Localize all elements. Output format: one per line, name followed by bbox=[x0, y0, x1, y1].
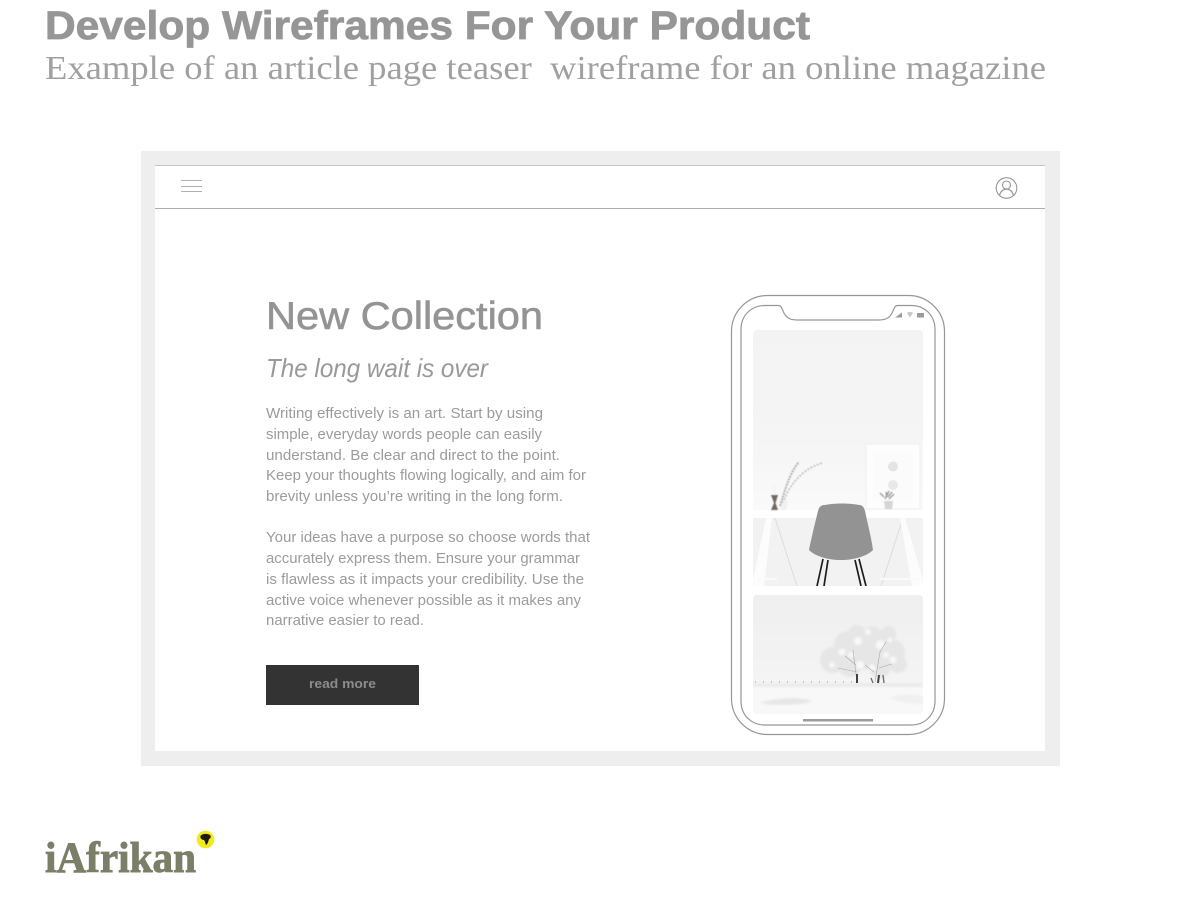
photo: desk and chair bbox=[753, 330, 923, 586]
paragraph two: Your ideas have a purpose so choose words that bbox=[266, 529, 591, 546]
paragraph one: simple, everyday words people can easily bbox=[266, 426, 542, 443]
paragraph one: understand. Be clear and direct to the point. bbox=[266, 447, 560, 464]
article subheading: The long wait is over bbox=[266, 353, 489, 383]
home indicator bbox=[803, 719, 873, 722]
paragraph two: is flawless as it impacts your credibility. Use the bbox=[266, 571, 584, 588]
table bbox=[753, 510, 923, 586]
tree bbox=[820, 625, 907, 683]
icon: africa globe bbox=[197, 831, 214, 848]
vase and twigs bbox=[771, 462, 822, 510]
small plant bbox=[880, 491, 894, 509]
article heading: New Collection bbox=[266, 295, 543, 338]
paragraph two: active voice whenever possible as it makes any bbox=[266, 592, 581, 609]
snow patches bbox=[760, 698, 812, 705]
phone outline bbox=[732, 296, 944, 734]
paragraph one bbox=[266, 405, 586, 505]
paragraph one: brevity unless you’re writing in the long form. bbox=[266, 488, 563, 505]
icon: user profile bbox=[996, 178, 1017, 198]
picture frame bbox=[866, 455, 920, 510]
phone screen outline with notch bbox=[741, 306, 935, 725]
icon: status bar bbox=[895, 312, 924, 318]
paragraph two: accurately express them. Ensure your grammar bbox=[266, 550, 580, 567]
paragraph two: narrative easier to read. bbox=[266, 612, 424, 629]
button: read more: read more bbox=[309, 676, 376, 691]
subtitle: Example of an article page teaser wireframe for an online magazine bbox=[45, 50, 1046, 87]
button: read more bbox=[266, 665, 419, 705]
title: Develop Wireframes For Your Product bbox=[45, 4, 810, 48]
paragraph one: Keep your thoughts flowing logically, and aim for bbox=[266, 467, 586, 484]
paragraph one: Writing effectively is an art. Start by using bbox=[266, 405, 543, 422]
panel: browser wireframe bbox=[141, 151, 1060, 766]
photo: snowy tree bbox=[753, 595, 923, 714]
paragraph two bbox=[266, 529, 591, 629]
phone mockup bbox=[732, 296, 944, 734]
icon: hamburger menu bbox=[181, 180, 202, 192]
chair bbox=[809, 504, 873, 586]
navigation bar bbox=[155, 165, 1045, 209]
horizon fence bbox=[755, 681, 855, 683]
logo: iAfrikan: iAfrikan bbox=[45, 835, 196, 882]
